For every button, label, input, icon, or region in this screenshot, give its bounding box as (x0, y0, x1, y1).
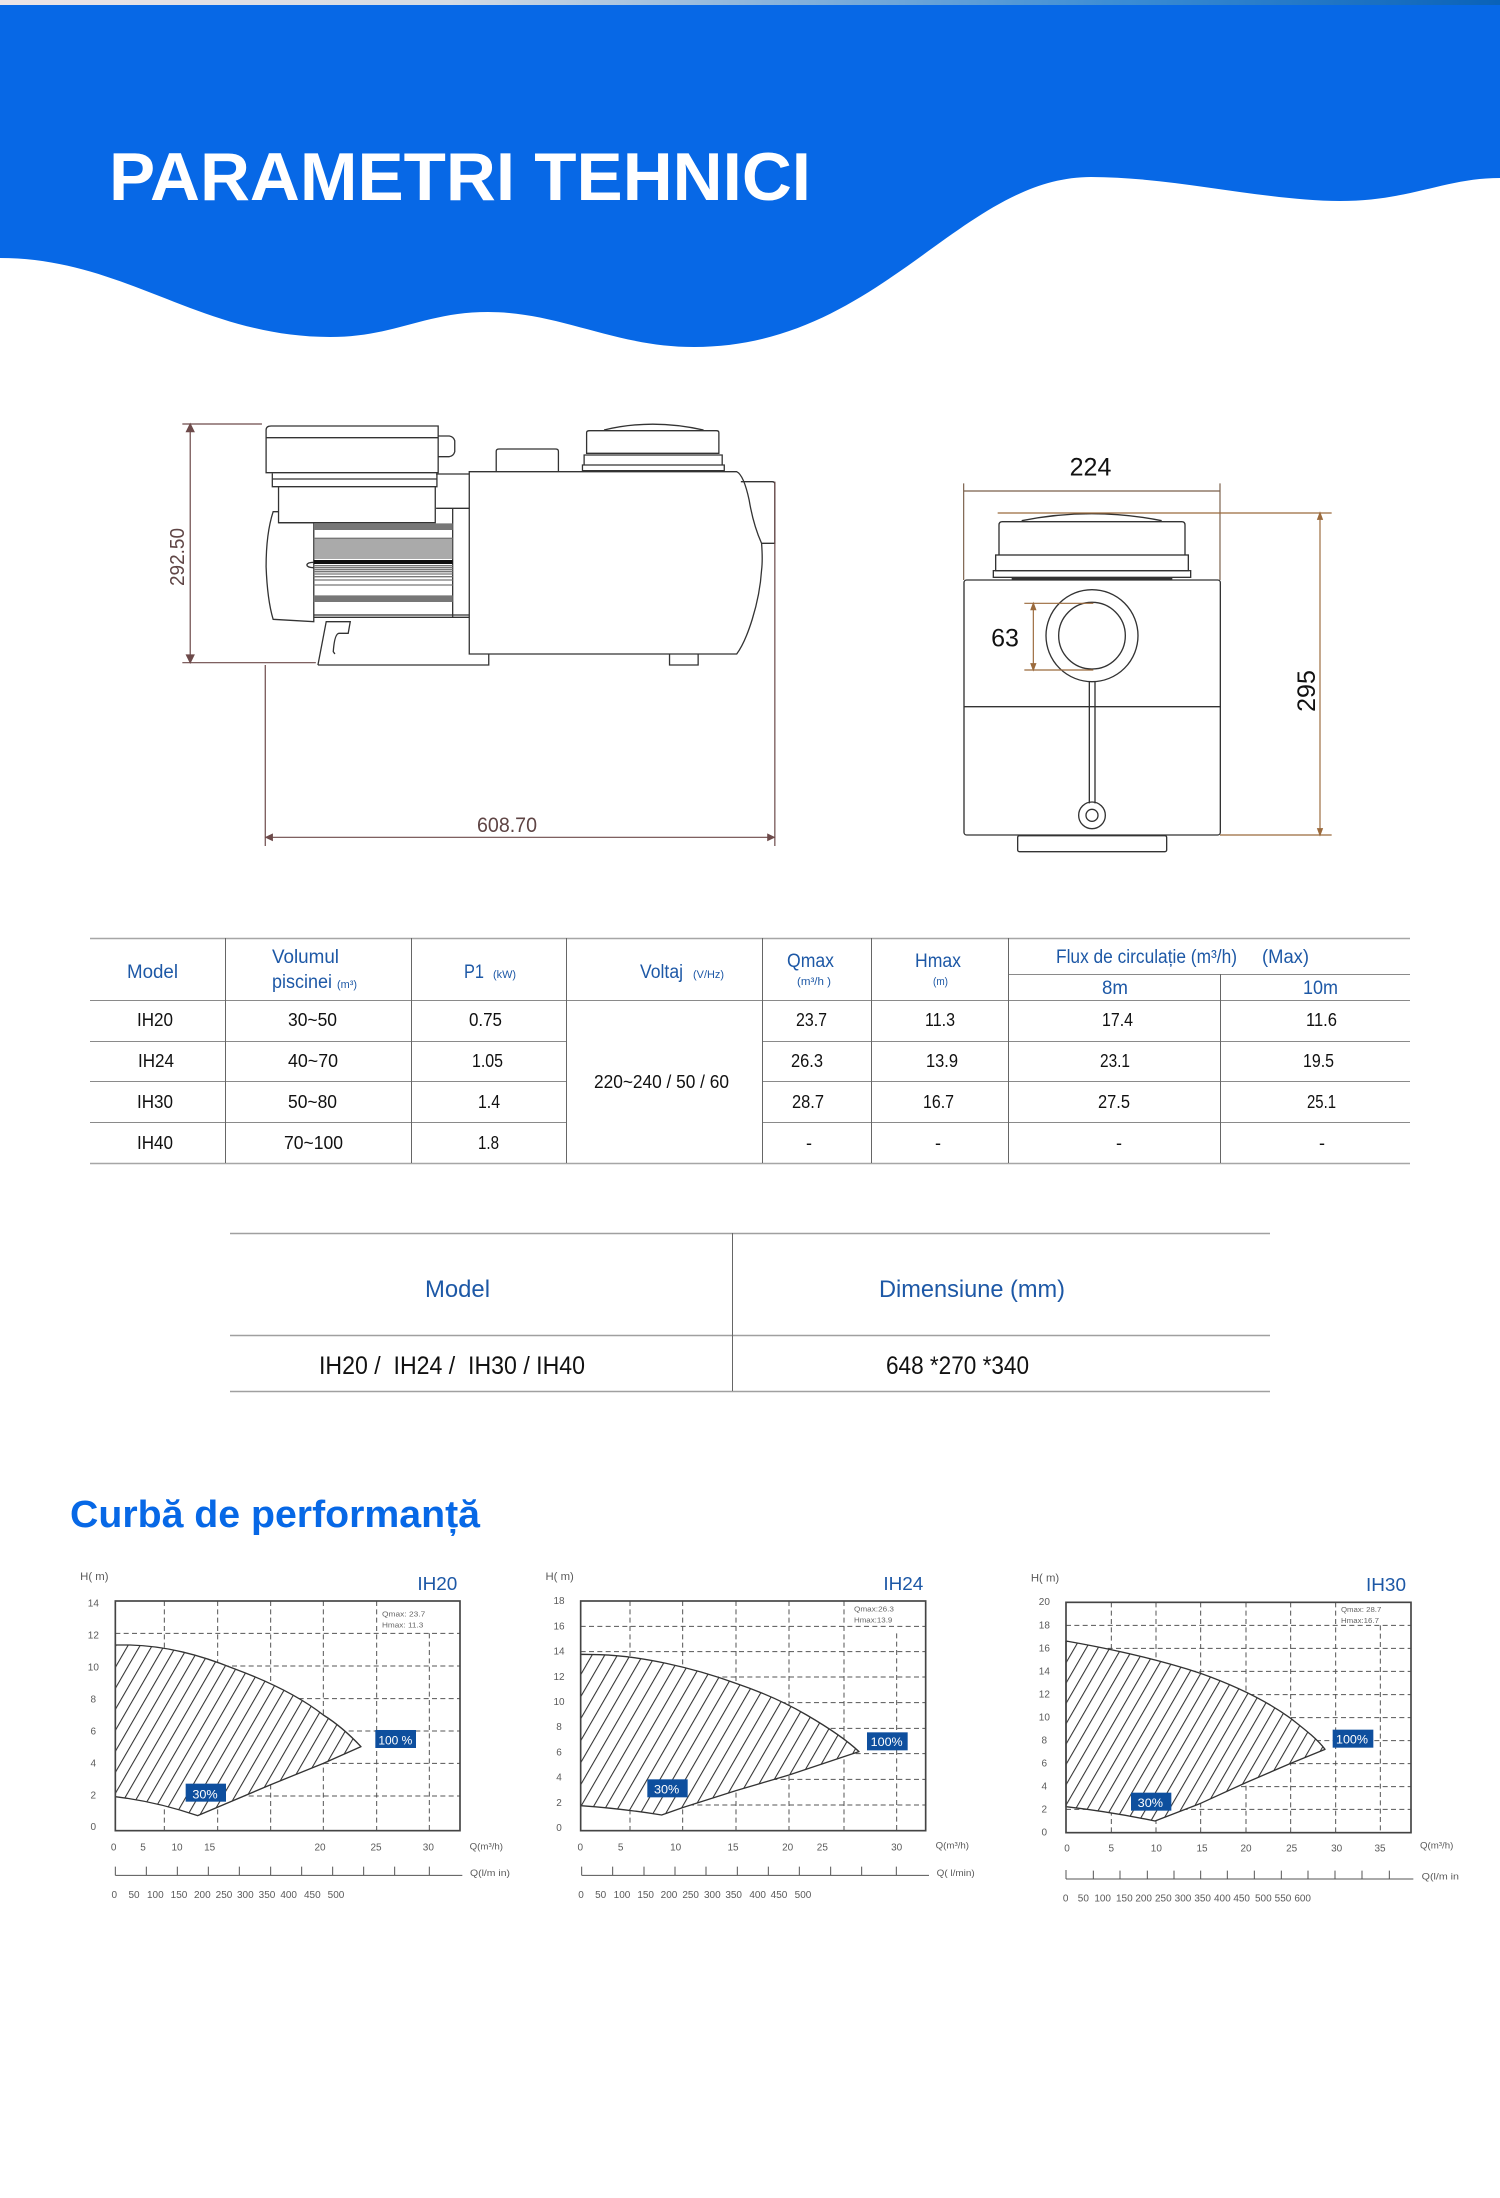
x axis labels: Q(m³/h) (936, 1840, 969, 1850)
x axis labels: 20 (1240, 1844, 1252, 1855)
secondary axis labels: Q(l/m in) (470, 1868, 510, 1878)
chart title: IH30 (1366, 1574, 1406, 1595)
table header: (m) (933, 976, 948, 988)
chart grid (1066, 1602, 1411, 1833)
table body: 50~80 (288, 1092, 337, 1112)
table body: - (1116, 1133, 1122, 1153)
chart frame (1066, 1602, 1411, 1833)
secondary axis labels: 350 (1194, 1893, 1211, 1904)
table body: 220~240 / 50 / 60 (594, 1072, 729, 1092)
secondary axis (115, 1867, 462, 1875)
y axis labels: 10 (553, 1697, 565, 1708)
table header: Qmax (787, 951, 834, 972)
table body: 23.7 (796, 1010, 827, 1030)
secondary axis labels: 400 (749, 1890, 766, 1901)
y axis labels (545, 1571, 574, 1834)
hatched operating area (115, 1645, 361, 1816)
secondary axis labels: 400 (280, 1890, 297, 1901)
y axis labels: 2 (1042, 1805, 1048, 1816)
y axis labels: H( m) (545, 1571, 574, 1583)
y axis labels: 6 (556, 1748, 562, 1759)
note: Qmax Hmax: Qmax: 23.7 (382, 1609, 425, 1618)
table body: IH40 (137, 1133, 173, 1153)
secondary axis labels: 350 (259, 1890, 276, 1901)
x axis labels: 30 (891, 1843, 903, 1854)
y axis labels: 4 (1042, 1782, 1048, 1793)
secondary axis labels: 250 (216, 1890, 233, 1901)
secondary axis (582, 1867, 929, 1875)
y axis labels: 16 (553, 1621, 565, 1632)
x axis labels: 15 (727, 1843, 739, 1854)
y axis labels: 4 (91, 1759, 97, 1770)
chart: IH20 (80, 1571, 510, 1901)
note: Qmax Hmax (854, 1605, 894, 1625)
section heading: Curbă de performanță (70, 1494, 481, 1536)
y axis labels: 0 (91, 1822, 97, 1833)
dimension lines (182, 424, 775, 846)
x axis labels: 5 (618, 1843, 624, 1854)
table body: 70~100 (284, 1133, 343, 1153)
y axis labels: 10 (88, 1663, 99, 1674)
table body: - (806, 1133, 812, 1153)
secondary axis labels: 50 (1078, 1893, 1089, 1904)
y axis labels: 8 (1042, 1736, 1048, 1747)
note: Qmax Hmax: Hmax:16.7 (1341, 1616, 1379, 1625)
note: Qmax Hmax (1341, 1605, 1381, 1625)
x axis labels: 5 (140, 1843, 146, 1854)
y axis labels: 12 (1039, 1689, 1050, 1700)
chart: IH24 (545, 1571, 975, 1901)
x axis labels: 25 (1286, 1844, 1298, 1855)
dimensions row: size: 648 *270 *340 (886, 1352, 1029, 1380)
dimension: port: 63 (991, 624, 1019, 652)
table header: (m³/h ) (797, 976, 831, 988)
table header: (m³) (337, 979, 357, 991)
secondary axis labels: 250 (1155, 1893, 1172, 1904)
front dimension lines (964, 483, 1332, 835)
table body: 17.4 (1102, 1010, 1133, 1030)
secondary axis labels: Q(l/m in (1422, 1871, 1459, 1881)
hatched operating area (581, 1654, 859, 1815)
secondary axis labels: 0 (1063, 1893, 1069, 1904)
title: PARAMETRI TEHNICI (109, 139, 811, 215)
y axis labels: 12 (88, 1631, 99, 1642)
y axis labels: 18 (1039, 1620, 1050, 1631)
secondary axis labels: 250 (682, 1890, 699, 1901)
secondary axis labels: 50 (128, 1890, 140, 1901)
secondary axis labels: 450 (304, 1890, 321, 1901)
secondary axis labels: 600 (1294, 1893, 1311, 1904)
table header: piscinei (272, 972, 332, 993)
secondary axis labels: 100 (1094, 1893, 1111, 1904)
diagram: pump side view (167, 424, 775, 846)
table body: 30~50 (288, 1010, 337, 1030)
label: 30%: 30% (654, 1783, 679, 1797)
label: 30%: 30% (192, 1787, 218, 1801)
side view drawing (266, 424, 775, 665)
chart title: IH24 (883, 1573, 923, 1594)
secondary axis labels: 0 (578, 1890, 584, 1901)
secondary axis labels: 500 (795, 1890, 812, 1901)
table body: 1.4 (478, 1092, 500, 1112)
x axis labels: 30 (1331, 1844, 1343, 1855)
table header: 10m (1303, 978, 1338, 999)
table body (137, 1010, 1337, 1153)
y axis labels: 2 (556, 1798, 562, 1809)
secondary axis labels: Q( l/min) (937, 1868, 975, 1878)
table header (127, 947, 1338, 999)
y axis labels: 16 (1039, 1643, 1050, 1654)
note: Qmax Hmax (382, 1609, 425, 1630)
table body: - (935, 1133, 941, 1153)
x axis labels: 20 (314, 1843, 326, 1854)
chart: IH30 (1031, 1573, 1459, 1904)
x axis labels (1064, 1840, 1453, 1855)
table header: P1 (464, 962, 484, 983)
dimensions header: size: Dimensiune (mm) (879, 1276, 1065, 1303)
table body: 0.75 (469, 1010, 502, 1030)
y axis labels: 0 (1042, 1828, 1048, 1839)
table body: 25.1 (1307, 1092, 1336, 1112)
secondary axis labels: 300 (1175, 1893, 1192, 1904)
secondary axis labels: 150 (171, 1890, 188, 1901)
label: 30% (647, 1779, 688, 1797)
note: Qmax Hmax: Hmax:13.9 (854, 1616, 892, 1625)
header banner (0, 0, 1500, 347)
chart grid (115, 1601, 460, 1831)
label: 100%: 100% (1336, 1733, 1368, 1747)
table body: IH30 (137, 1092, 173, 1112)
y axis labels: 18 (553, 1596, 565, 1607)
label: 100% (375, 1730, 416, 1748)
y axis labels: 12 (553, 1672, 565, 1683)
table body: 19.5 (1303, 1051, 1334, 1071)
x axis labels: 30 (423, 1843, 434, 1854)
table header: Model (127, 962, 178, 983)
note: Qmax Hmax: Qmax:26.3 (854, 1605, 894, 1614)
secondary axis labels: 200 (194, 1890, 211, 1901)
x axis labels: 0 (1064, 1844, 1070, 1855)
secondary axis labels (1063, 1871, 1459, 1904)
secondary axis labels: 0 (112, 1890, 118, 1901)
table header: (Max) (1262, 947, 1309, 968)
x axis labels: 15 (1196, 1844, 1208, 1855)
secondary axis labels: 400 (1214, 1893, 1231, 1904)
x axis labels: Q(m³/h) (1420, 1840, 1453, 1850)
x axis labels: 10 (1151, 1844, 1162, 1855)
secondary axis labels: 200 (1135, 1893, 1152, 1904)
table header: (V/Hz) (693, 969, 724, 981)
dimensions header: model: Model (425, 1276, 490, 1303)
table body: 28.7 (792, 1092, 824, 1112)
y axis labels (80, 1571, 108, 1833)
secondary axis labels: 200 (661, 1890, 678, 1901)
secondary axis labels: 500 (328, 1890, 345, 1901)
table: technical parameters (90, 938, 1410, 1164)
secondary axis labels: 550 (1275, 1893, 1292, 1904)
x axis labels: 35 (1374, 1844, 1386, 1855)
secondary axis labels (578, 1868, 975, 1901)
x axis labels: 20 (782, 1843, 794, 1854)
table body: 23.1 (1100, 1051, 1130, 1071)
x axis labels (578, 1840, 969, 1854)
front view drawing (964, 514, 1220, 852)
note: Qmax Hmax: Hmax: 11.3 (382, 1621, 423, 1630)
label: 30% (186, 1784, 226, 1802)
y axis labels: 6 (91, 1727, 97, 1738)
secondary axis labels (112, 1868, 510, 1901)
x axis labels: 15 (204, 1843, 216, 1854)
y axis labels (1031, 1573, 1059, 1839)
table body: IH24 (138, 1051, 174, 1071)
x axis labels: 25 (817, 1843, 828, 1854)
secondary axis labels: 300 (237, 1890, 254, 1901)
x axis labels: 25 (370, 1843, 382, 1854)
dimension: total height: 295 (1293, 670, 1321, 712)
x axis labels: 0 (578, 1843, 584, 1854)
table body: - (1319, 1133, 1325, 1153)
secondary axis labels: 50 (595, 1890, 607, 1901)
diagram: pump front view (964, 454, 1332, 852)
table body: 11.3 (925, 1010, 955, 1030)
table body: 27.5 (1098, 1092, 1130, 1112)
dimension: width: 224 (1070, 454, 1111, 482)
dimensions grid (230, 1233, 1270, 1392)
table header: Volumul (272, 947, 339, 968)
secondary axis (1066, 1870, 1413, 1879)
secondary axis labels: 150 (1116, 1893, 1133, 1904)
table header: 8m (1102, 978, 1128, 999)
x axis labels: 5 (1109, 1844, 1115, 1855)
y axis labels: H( m) (80, 1571, 108, 1583)
table body: 26.3 (791, 1051, 823, 1071)
table grid (90, 938, 1410, 1164)
chart title: IH20 (417, 1573, 457, 1594)
secondary axis labels: 150 (637, 1890, 654, 1901)
dimension: length: 608.70 (477, 814, 537, 837)
table body: 13.9 (926, 1051, 958, 1071)
secondary axis labels: 350 (725, 1890, 742, 1901)
chart grid (581, 1601, 926, 1831)
y axis labels: 20 (1039, 1597, 1050, 1608)
y axis labels: 8 (556, 1722, 562, 1733)
x axis labels: 0 (111, 1843, 117, 1854)
y axis labels: 4 (556, 1773, 562, 1784)
label: 30% (1131, 1793, 1171, 1811)
table: dimensions (230, 1233, 1270, 1392)
table body: 40~70 (288, 1051, 338, 1071)
label: 100% (1333, 1730, 1373, 1748)
chart frame (115, 1601, 460, 1831)
table header: Hmax (915, 951, 961, 972)
table header: Flux de circulație (m³/h) (1056, 947, 1237, 968)
y axis labels: 14 (553, 1646, 565, 1657)
hatched operating area (1066, 1641, 1325, 1821)
secondary axis labels: 450 (771, 1890, 788, 1901)
y axis labels: H( m) (1031, 1573, 1059, 1585)
table body: IH20 (137, 1010, 173, 1030)
secondary axis labels: 100 (614, 1890, 631, 1901)
y axis labels: 14 (88, 1599, 99, 1610)
table body: 11.6 (1306, 1010, 1337, 1030)
secondary axis labels: 100 (147, 1890, 164, 1901)
table body: 1.8 (478, 1133, 499, 1153)
y axis labels: 14 (1039, 1666, 1050, 1677)
table body: 16.7 (923, 1092, 954, 1112)
label: 100%: 100 % (378, 1733, 412, 1747)
label: 100%: 100% (871, 1735, 903, 1749)
chart frame (581, 1601, 926, 1831)
x axis labels (111, 1841, 503, 1854)
label: 30%: 30% (1138, 1796, 1163, 1810)
secondary axis labels: 450 (1233, 1893, 1250, 1904)
dimension: height: 292.50 (167, 528, 189, 586)
y axis labels: 0 (556, 1823, 562, 1834)
y axis labels: 6 (1042, 1759, 1048, 1770)
x axis labels: 10 (171, 1843, 183, 1854)
table body: 1.05 (472, 1051, 503, 1071)
label: 100% (867, 1732, 908, 1750)
x axis labels: 10 (670, 1843, 682, 1854)
dimensions row: models: IH20 / IH24 / IH30 / IH40 (319, 1352, 585, 1380)
y axis labels: 10 (1039, 1712, 1050, 1723)
secondary axis labels: 300 (704, 1890, 721, 1901)
note: Qmax Hmax: Qmax: 28.7 (1341, 1605, 1381, 1614)
y axis labels: 2 (91, 1790, 97, 1801)
y axis labels: 8 (91, 1695, 97, 1706)
secondary axis labels: 500 (1255, 1893, 1272, 1904)
table header: (kW) (493, 969, 516, 981)
x axis labels: Q(m³/h) (470, 1841, 503, 1851)
table header: Voltaj (640, 962, 683, 983)
